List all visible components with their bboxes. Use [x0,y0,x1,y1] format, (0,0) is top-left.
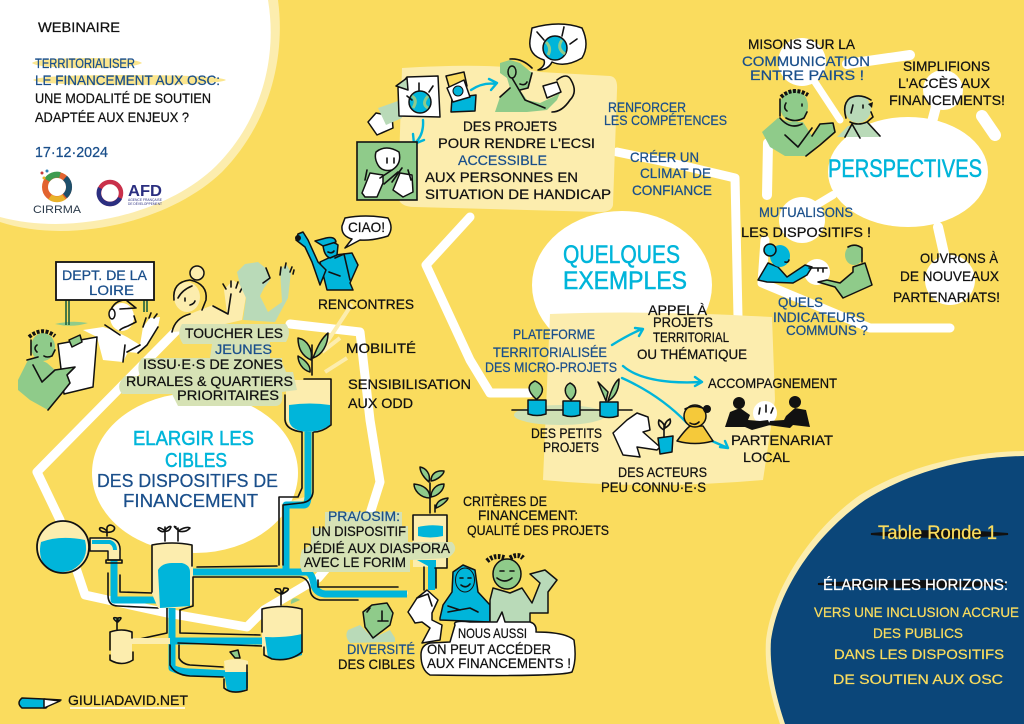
arrows: platform outcomes [612,328,728,448]
icon: OSIM pot with plant [413,467,448,590]
arrow: documents to signer [413,120,424,144]
pipes: water network [90,428,408,677]
text: pool mechanisms [741,204,871,240]
sign: department of Loire: LOIRE [89,282,134,298]
panel: round table 1: DANS LES DISPOSITIFS [834,646,1004,662]
text: SDG awareness [348,376,471,411]
text: accessible projects: ACCESSIBLE [458,152,547,168]
text: peer communication: MISONS SUR LA [748,36,856,52]
text: common indicators: QUELS [778,294,823,310]
panel: webinar header [0,0,280,231]
panel: elargir les cibles: FINANCEMENT [123,491,258,511]
icon: documents with globe [368,72,476,135]
text: new partnerships: OUVRONS À [920,250,999,266]
text: call for projects: PROJETS [653,314,713,330]
text: call for projects: OU THÉMATIQUE [637,346,747,362]
text: climate of trust [630,149,712,198]
speech bubble: globe with arrows [530,24,586,70]
panel: quelques exemples: QUELQUES [563,241,680,269]
text: common indicators [773,294,868,338]
text: strengthen skills: LES COMPÉTENCES [604,112,727,128]
text: diaspora mechanism: PRA/OSIM: [328,508,400,524]
panel: elargir les cibles: DES DISPOSITIFS DE [97,471,278,491]
text: pool mechanisms: MUTUALISONS [759,204,853,220]
icon: tall pot with plant [285,333,331,432]
text: SDG awareness: SENSIBILISATION [348,376,471,392]
text: strengthen skills [604,99,727,128]
figure: smiling woman waving [487,556,557,623]
logo: CIRRMA [33,170,82,216]
panel: webinar header: WEBINAIRE [38,19,120,35]
text: simplify access: FINANCEMENTS! [889,92,1005,108]
text: new partnerships [893,250,1000,305]
text: local partnership [731,432,833,465]
logo: AFD [99,182,162,206]
figure: man with headset waving [83,300,160,362]
text: support: ACCOMPAGNEMENT [708,375,837,391]
text: reach young people: JEUNES [215,341,272,357]
icon: water tank with tap [37,521,122,573]
figure: man receiving key [818,245,872,298]
text: mobility: MOBILITÉ [346,340,416,356]
text: accessible projects: SITUATION DE HANDICAP [425,186,611,202]
figure: woman with bun waving [172,266,247,332]
chart: row of small project pots [512,379,632,425]
figure: man with paper [18,331,97,410]
icon: left small pot [110,618,170,664]
text: pool mechanisms: LES DISPOSITIFS ! [741,224,871,240]
text: territorial micro-project platform: TERRITORIALISÉE [493,344,607,360]
text: local partnership: PARTENARIAT [731,432,833,448]
text: reach young people: TOUCHER LES [185,325,283,341]
strike: table title [818,531,1008,587]
text: funding criteria: CRITÈRES DE [463,493,547,509]
text: call for projects [637,302,747,362]
text: common indicators: COMMUNS ? [786,322,868,338]
figure: blue backpacker waving [295,232,358,290]
panel: round table 1: DES PUBLICS [873,625,963,641]
route: white connecting paths [37,55,995,627]
logo: CIRRMA: CIRRMA [33,204,82,216]
text: diversity of targets: DIVERSITÉ [347,641,415,657]
text: funding criteria: QUALITÉ DES PROJETS [467,522,609,538]
figure: man with moustache [346,603,395,643]
text: simplify access: SIMPLIFIONS [903,58,990,74]
text: territorial micro-project platform [485,326,617,375]
figure: woman reading with headphones [495,59,574,112]
text: diversity of targets: DES CIBLES [338,656,415,672]
text: diaspora mechanism: DÉDIÉ AUX DIASPORA [303,540,451,556]
text: accessible projects: POUR RENDRE L'ECSI [438,135,595,151]
panel: perspectives: PERSPECTIVES [828,155,982,183]
panel: webinar header: UNE MODALITÉ DE SOUTIEN [35,90,211,106]
panel: round table 1: ÉLARGIR LES HORIZONS: [823,575,1008,594]
text: diversity of targets [338,641,415,672]
figure: person potting a plant [613,413,673,457]
text: reach young people: PRIORITAIRES [177,387,279,403]
text: small projects: PROJETS [543,439,599,455]
text: peer communication: ENTRE PAIRS ! [750,67,864,83]
text: peer communication: COMMUNICATION [742,53,870,69]
arrow: documents to reader [471,79,497,90]
text: local partnership: LOCAL [743,449,790,465]
panel: webinar header: TERRITORIALISER [35,55,135,71]
text: reach young people: ISSU·E·S DE ZONES [143,356,283,372]
text: new partnerships: PARTENARIATS! [893,289,1000,305]
panel: webinar header: 17·12·2024 [35,144,108,161]
figure: person waving [237,262,294,322]
panel: webinar header: LE FINANCEMENT AUX OSC: [35,72,220,88]
text: funding criteria: FINANCEMENT: [478,507,578,523]
text: strengthen skills: RENFORCER [608,99,686,115]
panel: round table 1: DE SOUTIEN AUX OSC [833,671,1003,687]
text: accessible projects: DES PROJETS [463,118,557,134]
text: accessible projects [425,118,611,202]
panel: top box accessible ECSI [398,66,617,212]
figure: bearded man talking [762,90,835,156]
text: climate of trust: CLIMAT DE [640,165,711,181]
text: common indicators: INDICATEURS [773,309,865,325]
panel: quelques exemples [532,211,775,485]
text: call for projects: TERRITORIAL [653,329,729,345]
icon: sign language person [357,142,417,200]
text: reach young people: RURALES & QUARTIERS [126,373,293,389]
text: diaspora mechanism: AVEC LE FORIM [304,554,406,570]
text: territorial micro-project platform: PLATEFORME [513,326,595,342]
figure: woman offering key [758,244,827,283]
icon: bottom small pot [224,650,248,692]
text: simplify access: L'ACCÈS AUX [898,75,991,91]
speech bubble: ciao [342,216,391,248]
speech bubble: we too can access funding: ON PEUT ACCÉDER [427,641,551,657]
sign: department of Loire [55,262,154,326]
panel: webinar header: ADAPTÉE AUX ENJEUX ? [35,109,189,125]
panel: elargir les cibles [92,393,298,553]
logo: AFD: AGENCE FRANÇAISE [128,197,162,202]
speech bubble: ciao: CIAO! [348,219,385,235]
text: funding criteria [463,493,609,538]
logo: AFD: AFD [128,183,162,200]
highlight: title [32,58,226,85]
sign: department of Loire: DEPT. DE LA [62,267,148,283]
text: climate of trust: CRÉER UN [630,149,699,165]
figure: white profile woman [408,590,442,643]
text: call for projects: APPEL À [648,302,708,318]
icon: handshake silhouettes [725,396,810,430]
credit: author signature: GIULIADAVID.NET [68,692,188,708]
panel: perspectives [778,38,988,305]
text: meetings: RENCONTRES [318,296,414,312]
panel: elargir les cibles: ELARGIR LES [133,428,254,450]
text: SDG awareness: AUX ODD [348,395,413,411]
text: accessible projects: AUX PERSONNES EN [425,169,578,185]
text: lesser known actors: DES ACTEURS [618,464,707,480]
figure: woman in blue hijab [440,565,490,622]
text: climate of trust: CONFIANCE [632,182,712,198]
text: reach young people [119,324,297,406]
text: peer communication [742,36,870,83]
text: new partnerships: DE NOUVEAUX [900,268,1000,284]
text: lesser known actors: PEU CONNU·E·S [601,479,706,495]
text: diaspora mechanism: UN DISPOSITIF [312,523,406,539]
text: simplify access [889,58,1005,108]
panel: quelques exemples: EXEMPLES [563,267,687,295]
text: small projects: DES PETITS [531,425,602,441]
panel: round table 1: Table Ronde 1 [878,523,997,544]
panel: round table 1 [766,451,1024,724]
figure: man listening [837,95,880,138]
text: territorial micro-project platform: DES MICRO-PROJETS [485,359,617,375]
panel: round table 1: VERS UNE INCLUSION ACCRUE [814,604,1019,620]
speech bubble: we too can access funding [421,612,575,676]
text: diaspora mechanism [300,508,455,572]
icon: right pot [262,588,302,660]
figure: person with hair bun [677,405,713,444]
icon: central pot [152,526,193,610]
text: lesser known actors [601,464,707,495]
speech bubble: we too can access funding: AUX FINANCEMENTS ! [427,655,571,671]
logo: AFD: DE DÉVELOPPEMENT [128,201,162,206]
speech bubble: we too can access funding: NOUS AUSSI [458,625,527,641]
panel: elargir les cibles: CIBLES [165,450,227,472]
text: small projects [531,425,602,455]
